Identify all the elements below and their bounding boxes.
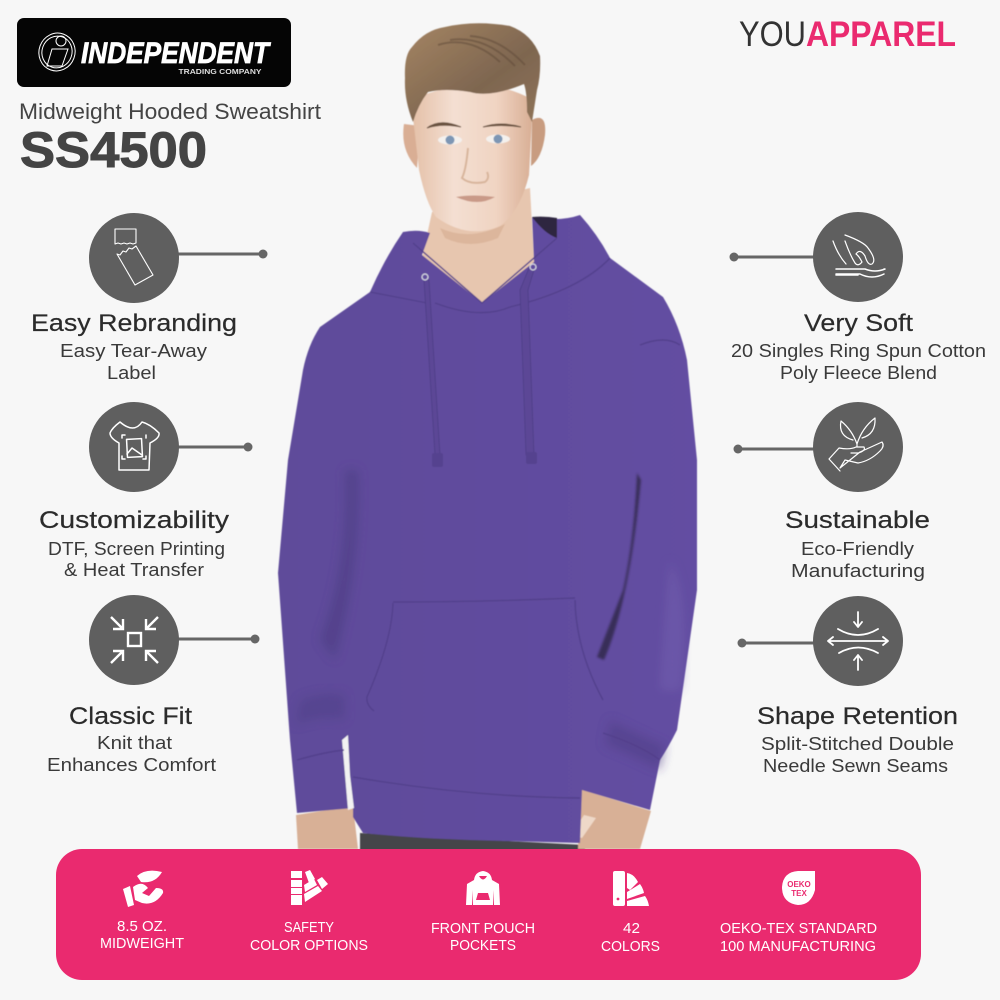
- description: & Heat Transfer: [64, 560, 204, 580]
- icon: shape retention arrows: [813, 596, 903, 686]
- label: MIDWEIGHT: [100, 935, 184, 952]
- label: [100, 918, 184, 952]
- logo wordmark: INDEPENDENT: [81, 37, 271, 70]
- label: [431, 920, 535, 954]
- icon: colour swatch fan: [291, 870, 328, 905]
- subtitle: Midweight Hooded Sweatshirt: [19, 99, 321, 124]
- connector: [730, 252, 815, 262]
- icon: OEKO-TEX badge: TEX: [791, 889, 807, 898]
- description: Needle Sewn Seams: [763, 756, 948, 776]
- description: Enhances Comfort: [47, 755, 216, 775]
- label: 8.5 OZ.: [117, 918, 167, 935]
- heading: Easy Rebranding: [31, 310, 237, 337]
- brand: YOUAPPAREL: YOU: [739, 15, 806, 54]
- feature: Sustainable: [734, 402, 930, 581]
- icon: compress arrows: [89, 595, 179, 685]
- brand: YOUAPPAREL: [739, 15, 956, 54]
- logo tagline: TRADING COMPANY: [178, 69, 262, 76]
- spec: colors: [601, 871, 660, 955]
- heading: Sustainable: [785, 507, 930, 534]
- description: [48, 539, 225, 580]
- description: [731, 341, 986, 383]
- model head: [403, 23, 545, 306]
- label: [250, 919, 368, 954]
- label: SAFETY: [284, 919, 334, 936]
- feature: Customizability: [39, 402, 252, 580]
- label: FRONT POUCH: [431, 920, 535, 937]
- product code: SS4500: [20, 122, 207, 178]
- description: DTF, Screen Printing: [48, 539, 225, 559]
- icon: tear-away label: [89, 213, 179, 303]
- hoodie body: [278, 215, 697, 843]
- icon: hand touching soft fabric: [813, 212, 903, 302]
- logo emblem: [34, 28, 80, 76]
- feature: Shape Retention: [738, 596, 958, 776]
- description: 20 Singles Ring Spun Cotton: [731, 341, 986, 361]
- label: [601, 920, 660, 955]
- label: 42: [623, 920, 640, 937]
- icon: colour fan: [613, 871, 649, 906]
- connector: [734, 444, 815, 454]
- heading: Customizability: [39, 507, 229, 534]
- description: [47, 733, 216, 775]
- description: Knit that: [97, 733, 172, 753]
- heading: Very Soft: [804, 310, 913, 337]
- description: [791, 539, 925, 581]
- description: [60, 341, 207, 383]
- hoodie shading and seams: [295, 217, 683, 810]
- brand: YOUAPPAREL: APPAREL: [806, 15, 956, 54]
- description: Easy Tear-Away: [60, 341, 207, 361]
- spec: safety colors: [250, 870, 368, 954]
- icon: hand holding plant: [813, 402, 903, 492]
- icon: hand with leaf: [123, 871, 163, 907]
- connector: [175, 442, 252, 452]
- hands and trousers: [296, 789, 651, 852]
- description: Manufacturing: [791, 561, 925, 581]
- icon: OEKO-TEX badge: [782, 871, 815, 905]
- icon: OEKO-TEX badge: OEKO: [787, 880, 811, 889]
- label: [720, 920, 877, 955]
- connector: [175, 250, 268, 258]
- model wearing purple hoodie: [278, 23, 697, 852]
- logo badge: [17, 18, 291, 87]
- icon: printed t-shirt: [89, 402, 179, 492]
- description: Poly Fleece Blend: [780, 363, 937, 383]
- feature: Easy Rebranding: [31, 213, 268, 383]
- spec: OEKO-TEX: [720, 871, 877, 955]
- label: COLOR OPTIONS: [250, 937, 368, 954]
- label: POCKETS: [450, 937, 516, 954]
- description: Label: [107, 363, 156, 383]
- description: Eco-Friendly: [801, 539, 914, 559]
- heading: Shape Retention: [757, 703, 958, 730]
- connector: [175, 634, 260, 644]
- description: [761, 734, 954, 776]
- feature: Classic Fit: [47, 595, 260, 775]
- spec: pouch pockets: [431, 871, 535, 954]
- label: OEKO-TEX STANDARD: [720, 920, 877, 937]
- description: Split-Stitched Double: [761, 734, 954, 754]
- feature: Very Soft: [730, 212, 986, 383]
- panel: product specs: [56, 849, 921, 980]
- icon: hoodie: [466, 871, 500, 905]
- spec: weight: [100, 871, 184, 952]
- label: 100 MANUFACTURING: [720, 938, 876, 955]
- connector: [738, 638, 815, 648]
- label: COLORS: [601, 938, 660, 955]
- heading: Classic Fit: [69, 703, 192, 730]
